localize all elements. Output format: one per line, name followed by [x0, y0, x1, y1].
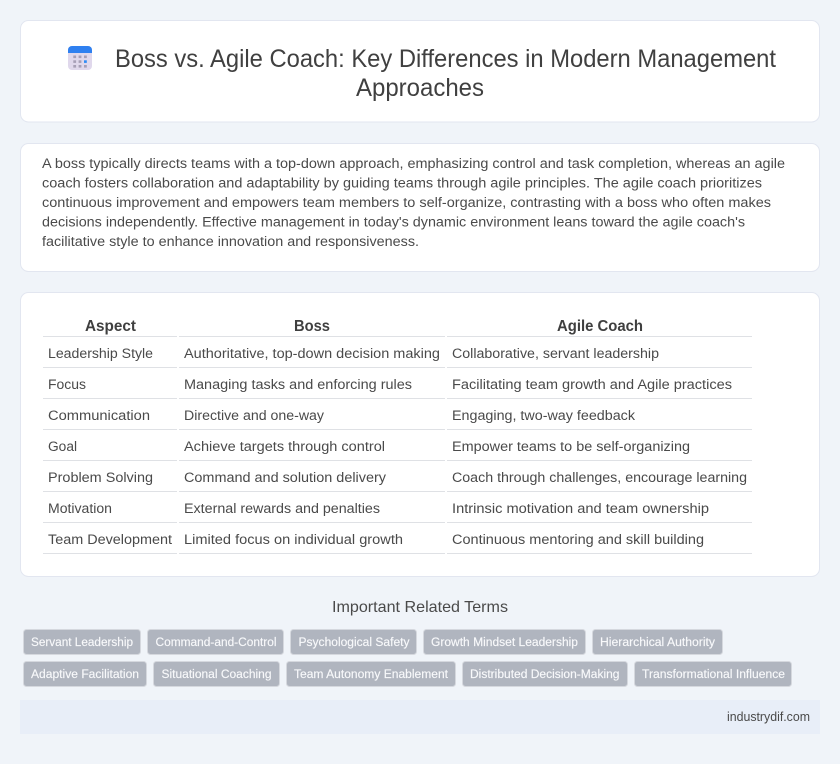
row: Motivation: External rewards and penalties: [184, 501, 380, 517]
panel: summary paragraph: [20, 144, 820, 272]
row: Problem Solving: [48, 470, 747, 486]
row: Team Development: Continuous mentoring and skill building: [452, 532, 704, 548]
row: Leadership Style: Authoritative, top-down decision making: [184, 346, 440, 362]
footer: [20, 700, 820, 734]
row: Motivation: [48, 501, 709, 517]
row: Focus: [48, 377, 732, 393]
title: Boss vs. Agile Coach: Key Differences in Modern Management: [115, 45, 776, 73]
row: Problem Solving: Command and solution delivery: [184, 470, 387, 486]
tags: related terms: Situational Coaching: [162, 667, 272, 681]
table header: Agile Coach: [557, 318, 643, 335]
footer: industrydif.com: [727, 710, 810, 724]
tags: related terms: Psychological Safety: [298, 635, 410, 649]
tags: related terms: Growth Mindset Leadership: [431, 635, 578, 649]
row: Team Development: Team Development: [48, 532, 172, 548]
row: Team Development: [48, 532, 704, 548]
row: Goal: Achieve targets through control: [184, 439, 385, 455]
text block: summary: coach fosters collaboration and adaptability by guiding teams through agile principles. The agile coach prioritizes: [42, 176, 762, 192]
row: Goal: [48, 439, 690, 455]
row: Problem Solving: Problem Solving: [48, 470, 153, 486]
table header: Boss: [294, 318, 330, 335]
row: Focus: Managing tasks and enforcing rules: [184, 377, 412, 393]
text block: summary: A boss typically directs teams with a top-down approach, emphasizing control and task completion, whereas an agile: [42, 156, 785, 172]
panel: comparison table: [20, 292, 820, 576]
row: Communication: Directive and one-way: [184, 408, 325, 424]
row: Communication: Engaging, two-way feedback: [452, 408, 636, 424]
row: Goal: Goal: [48, 439, 77, 455]
text block: summary: facilitative style to enhance innovation and responsiveness.: [42, 234, 419, 250]
icon: calendar: [68, 46, 92, 70]
row: Communication: Communication: [48, 408, 150, 424]
row: Goal: Empower teams to be self-organizing: [452, 439, 690, 455]
tags: related terms: Servant Leadership: [31, 635, 133, 649]
row: Focus: Focus: [48, 377, 86, 393]
tags: related terms: Transformational Influence: [642, 667, 785, 681]
tags: related terms: Distributed Decision-Making: [470, 667, 620, 681]
title: [115, 45, 776, 102]
row: Focus: Facilitating team growth and Agile practices: [452, 377, 732, 393]
row: Motivation: Intrinsic motivation and team ownership: [452, 501, 709, 517]
panel: title header: [20, 20, 820, 122]
heading: related terms: Important Related Terms: [332, 599, 508, 616]
tags: related terms: [24, 630, 792, 686]
table header: Aspect: [85, 318, 137, 335]
text block: summary: decisions independently. Effective management in today's dynamic environment leans toward the agile coach's: [42, 214, 745, 230]
tags: related terms: Command-and-Control: [156, 635, 276, 649]
row: Leadership Style: [48, 346, 659, 362]
row: Problem Solving: Coach through challenges, encourage learning: [452, 470, 747, 486]
tags: related terms: Adaptive Facilitation: [31, 667, 139, 681]
row: Leadership Style: Leadership Style: [48, 346, 153, 362]
row: Motivation: Motivation: [48, 501, 112, 517]
row: Leadership Style: Collaborative, servant leadership: [452, 346, 659, 362]
title: Approaches: [356, 74, 484, 102]
table header: [85, 318, 643, 335]
text block: summary: continuous improvement and empowers team members to self-organize, contrasting with a boss who often makes: [42, 195, 771, 211]
tags: related terms: Team Autonomy Enablement: [294, 667, 449, 681]
text block: summary: [42, 156, 785, 250]
row: Communication: [48, 408, 636, 424]
row: Team Development: Limited focus on individual growth: [184, 532, 403, 548]
tags: related terms: Hierarchical Authority: [600, 635, 716, 649]
